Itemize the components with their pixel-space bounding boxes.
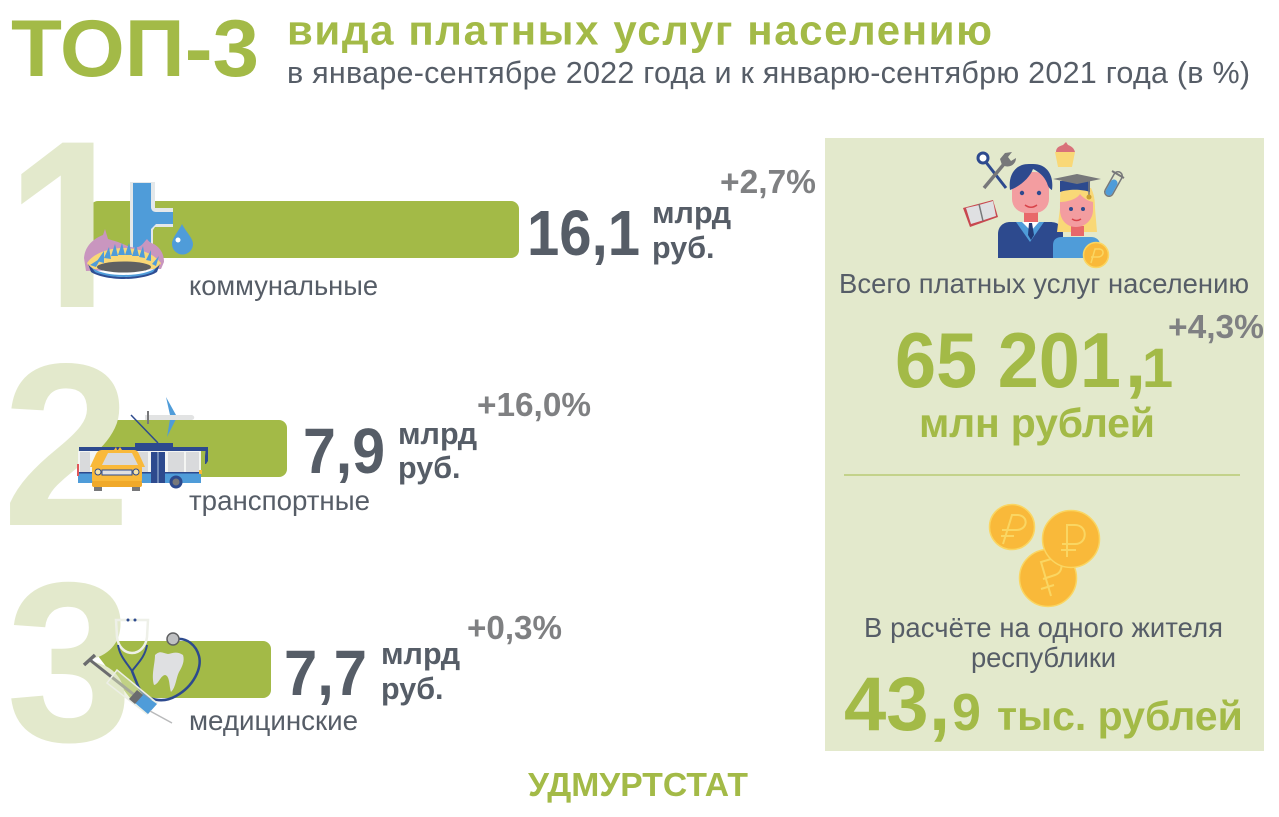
value 1: 16,1 <box>527 197 640 269</box>
icon: stethoscope, tooth and syringe <box>84 618 200 723</box>
value: total: , <box>1125 319 1146 404</box>
icon: ruble coins <box>990 504 1100 606</box>
text: of the republic: республики <box>971 642 1116 673</box>
man <box>998 222 1063 258</box>
value: per resident: тыс. рублей <box>997 693 1243 739</box>
unit 2: млрд <box>398 417 477 451</box>
title: ТОП-3: ТОП-3 <box>11 4 259 94</box>
numeral 3: 3 <box>6 536 133 790</box>
change 2: +16,0% <box>477 386 591 423</box>
unit 1: руб. <box>652 231 715 265</box>
numeral 2: 2 <box>2 316 131 575</box>
change: total: +4,3% <box>1168 308 1264 345</box>
bar 1 <box>90 201 519 258</box>
panel: totals <box>825 138 1264 751</box>
text: all paid services: Всего платных услуг населению <box>839 268 1249 299</box>
bar 3 <box>92 641 271 698</box>
coin <box>1084 242 1108 268</box>
numeral 1: 1 <box>5 83 138 396</box>
value 2: 7,9 <box>303 415 385 487</box>
label 2: транспортные <box>189 485 370 516</box>
unit 2: руб. <box>398 451 461 485</box>
unit: total: млн рублей <box>919 400 1155 446</box>
heading: вида платных услуг населению: вида платных услуг населению <box>287 6 992 54</box>
woman <box>1057 188 1097 232</box>
bar 2 <box>100 420 287 477</box>
subheading: period: в январе-сентябре 2022 года и к январю-сентябрю 2021 года (в %) <box>287 56 1250 90</box>
text: per resident: В расчёте на одного жителя <box>864 612 1223 643</box>
unit 3: руб. <box>381 672 444 706</box>
footer: source: УДМУРТСТАТ <box>528 766 748 803</box>
icon: plane, trolleybus and taxi <box>77 397 208 491</box>
unit 3: млрд <box>381 637 460 671</box>
change 1: +2,7% <box>720 163 816 200</box>
flask <box>1109 176 1118 192</box>
rank 2: transport services <box>2 316 591 575</box>
icon: water pipe and gas burner <box>84 182 193 279</box>
value: per resident: 43 <box>844 662 929 747</box>
tools <box>985 161 1006 188</box>
value: per resident: 9 <box>952 684 981 742</box>
value: total: 1 <box>1142 336 1173 399</box>
rank 1: communal services <box>5 83 816 396</box>
rank 3: medical services <box>6 536 562 790</box>
unit 1: млрд <box>652 196 731 230</box>
change 3: +0,3% <box>467 609 562 646</box>
value 3: 7,7 <box>284 637 367 709</box>
book <box>963 200 998 227</box>
label 3: медицинские <box>189 705 358 736</box>
label 1: коммунальные <box>189 270 378 301</box>
icon: people and services <box>963 142 1124 268</box>
value: total: 65 201 <box>895 316 1121 404</box>
value: per resident: , <box>929 662 950 747</box>
cupcake <box>1055 152 1075 167</box>
